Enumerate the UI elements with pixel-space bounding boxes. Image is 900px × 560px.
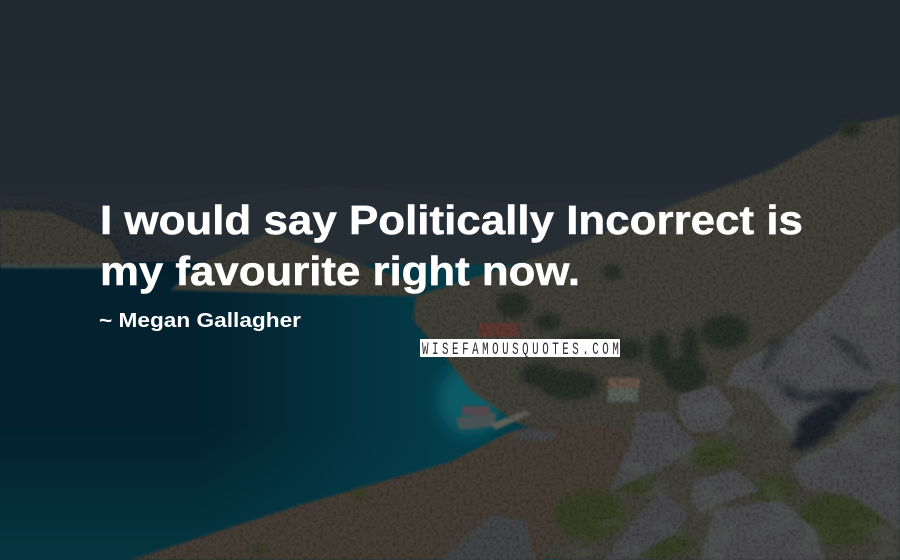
poster: quote over darkened coastal landscape [0, 115, 900, 560]
background: rock shadows [760, 330, 885, 452]
quote text: my favourite right now. [100, 248, 580, 294]
quote text: I would say Politically Incorrect is [100, 197, 803, 243]
house: red roof [479, 323, 519, 337]
boat [456, 406, 557, 441]
quote text [100, 197, 803, 294]
background: shrubs and trees [496, 119, 862, 400]
attribution: ~ Megan Gallagher [99, 310, 301, 332]
background: green scrub on lower slope [251, 441, 882, 559]
background: rock texture [580, 338, 893, 560]
background: limestone rocks [440, 225, 900, 560]
watermark badge: WISEFAMOUSQUOTES.COM [422, 341, 619, 360]
background: sea [0, 262, 560, 560]
background: texture overlay [0, 118, 900, 560]
background: hillside [413, 115, 900, 560]
house: waterside [608, 378, 640, 402]
background: foreshore [130, 420, 640, 560]
background: distant islands [0, 186, 780, 296]
